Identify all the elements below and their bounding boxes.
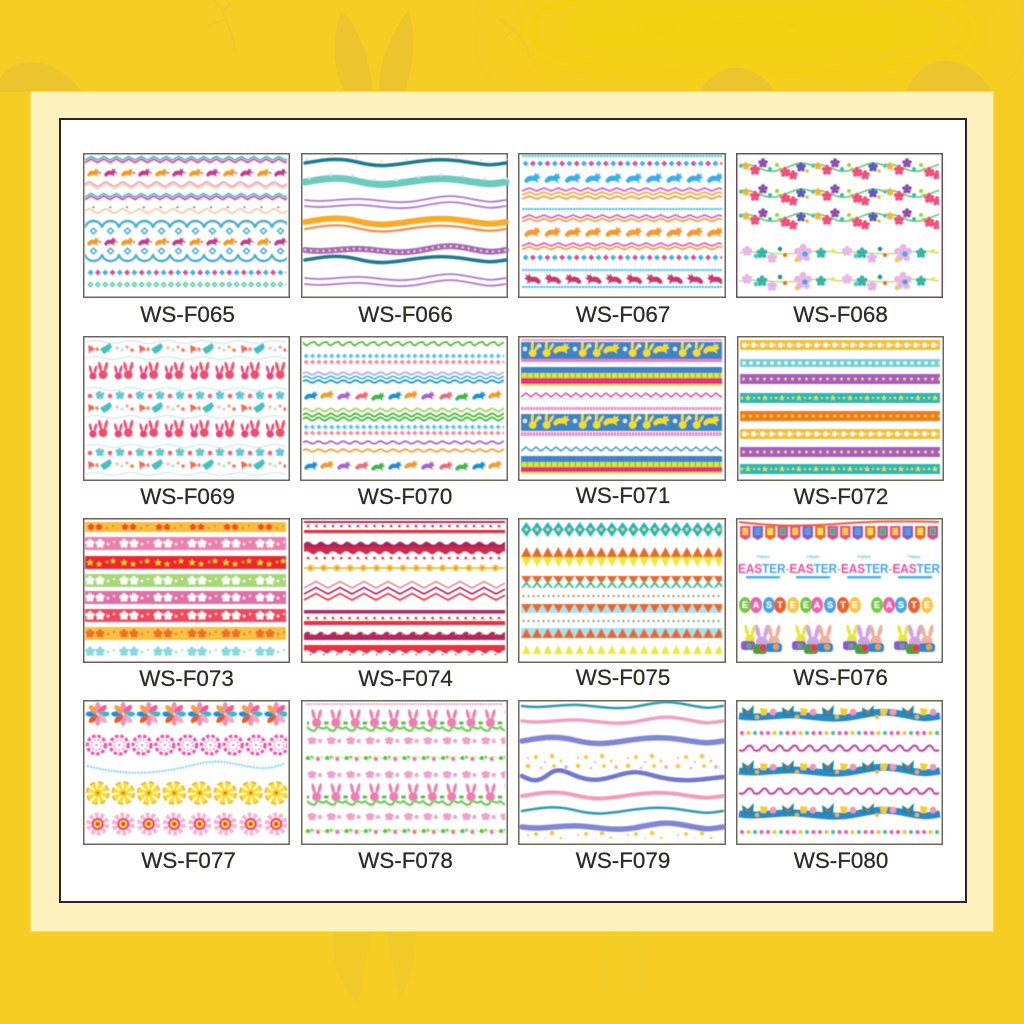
teal diamonds [521, 522, 722, 537]
blue rabbit band [521, 414, 722, 431]
frame [84, 337, 289, 480]
magenta stripe [521, 467, 722, 472]
dots [521, 830, 722, 839]
wave [85, 181, 287, 189]
purple dotted wave [305, 246, 506, 252]
rabbits [85, 168, 287, 178]
artwork [85, 522, 286, 657]
zigzag [85, 155, 287, 164]
pastel floral [739, 270, 939, 292]
pink sunflowers [85, 812, 287, 836]
yellow dots [305, 246, 506, 252]
frame [519, 701, 725, 844]
pink wave [522, 792, 723, 798]
card WS-F066 [302, 154, 510, 327]
blue wave [303, 379, 504, 384]
egg letters: E [742, 600, 748, 610]
pink zigzag [521, 392, 722, 398]
label: WS-F066 [358, 302, 453, 327]
teal line [86, 471, 286, 477]
red strip [85, 556, 286, 569]
happy easter words: EASTER-EASTER-EASTER-EASTER [738, 561, 941, 576]
frame [519, 519, 725, 662]
orange strip [740, 411, 940, 421]
dark teal wave [305, 256, 506, 262]
zigzag [522, 214, 722, 223]
dots [521, 594, 722, 598]
rabbits [303, 460, 504, 471]
bunny ears bottom [333, 931, 416, 1005]
butterflies [86, 459, 286, 471]
yellow triangles [521, 645, 722, 654]
artwork [521, 339, 722, 474]
frame [84, 519, 289, 662]
lavender wave [303, 371, 504, 376]
diamonds [85, 247, 287, 255]
yellow triangles [521, 557, 722, 567]
diamonds [85, 227, 287, 235]
outer cream panel [31, 92, 993, 931]
label: WS-F080 [794, 848, 888, 873]
artwork [85, 155, 287, 288]
dotted line [305, 703, 503, 705]
pink strip [85, 591, 286, 604]
artwork [739, 704, 940, 835]
light teal strip [740, 359, 940, 367]
orange green zigzag [521, 576, 722, 588]
red line [304, 530, 505, 533]
garland [739, 157, 939, 181]
scallop band [304, 540, 505, 556]
card WS-F074 [302, 519, 507, 691]
label: WS-F078 [358, 848, 453, 873]
happy easter words: Happy [907, 554, 921, 559]
orange wave [303, 448, 504, 453]
diamonds [522, 160, 722, 167]
card WS-F072 [738, 337, 943, 509]
blue wavy band [739, 767, 940, 773]
yellow strip [740, 429, 940, 439]
artwork [86, 339, 286, 477]
dots [739, 730, 939, 736]
pale teal band [521, 398, 722, 400]
vines [304, 828, 505, 835]
blue wavy band [739, 712, 940, 718]
egg letters: A [753, 600, 760, 610]
purple wave [305, 280, 506, 286]
purple strip [740, 374, 940, 384]
teal line [86, 355, 286, 361]
yellow line [521, 472, 722, 474]
green scallop [307, 726, 505, 732]
dotted wave [85, 205, 287, 214]
yellow strip [85, 627, 286, 640]
teal strip [740, 393, 940, 403]
blue rabbits [522, 172, 722, 184]
egg shapes top [0, 60, 993, 92]
teal wave [305, 178, 506, 184]
label: WS-F079 [576, 848, 670, 873]
garland [739, 207, 939, 231]
dots [521, 619, 722, 623]
pastel floral [739, 242, 939, 264]
purple wave [305, 202, 506, 208]
label: WS-F077 [141, 848, 236, 873]
artwork [738, 521, 941, 654]
blue line [522, 155, 722, 157]
zigzag [522, 187, 722, 202]
bunting [739, 521, 939, 541]
artwork [740, 340, 940, 474]
yellow dots [304, 564, 505, 572]
artwork [522, 155, 722, 288]
birds [739, 759, 939, 775]
green scallop [303, 340, 504, 347]
yellow strip [85, 522, 286, 532]
butterflies [86, 402, 286, 414]
bubbles [309, 174, 510, 180]
frame [84, 701, 289, 844]
egg letters: T [840, 600, 846, 610]
label: WS-F074 [358, 666, 453, 691]
bunnies [86, 419, 286, 439]
artwork [304, 703, 505, 835]
diamonds [87, 281, 286, 288]
egg bottom [600, 930, 648, 1010]
artwork [303, 340, 504, 471]
egg letters: T [777, 600, 783, 610]
egg letters: E [874, 600, 880, 610]
frame [301, 337, 507, 480]
birds [739, 802, 939, 818]
card WS-F068 [737, 154, 942, 327]
blue diamonds [303, 424, 504, 430]
bubbles [307, 155, 508, 162]
orange wave [305, 218, 506, 224]
green wave [303, 416, 504, 422]
label: WS-F069 [140, 484, 235, 509]
diamonds [87, 269, 286, 276]
flowers [86, 391, 286, 400]
garland [739, 183, 939, 207]
teal wave [522, 807, 723, 814]
butterflies [86, 343, 286, 355]
red dots [304, 615, 505, 621]
zigzag [85, 192, 287, 201]
card WS-F080 [737, 701, 942, 873]
blue diamonds [303, 353, 504, 359]
pink diamonds [303, 430, 504, 436]
green wave [303, 412, 504, 418]
artwork [305, 155, 510, 286]
blue line [522, 269, 722, 271]
frame [519, 154, 725, 297]
label: WS-F076 [793, 665, 888, 690]
yellow line [521, 384, 722, 386]
card WS-F070 [301, 337, 507, 509]
pink dashes [521, 407, 722, 410]
egg letters [739, 597, 933, 613]
red dots [304, 555, 505, 561]
paws [307, 771, 505, 778]
blue line [522, 208, 722, 210]
frame [737, 154, 942, 297]
card WS-F065 [84, 154, 289, 327]
happy easter words [738, 554, 941, 578]
zigzags [304, 580, 505, 604]
bunnies [307, 783, 505, 801]
light green wave [303, 407, 504, 413]
dots [739, 829, 939, 835]
label: WS-F075 [576, 665, 670, 690]
frame [302, 519, 507, 662]
egg letters: E [790, 600, 796, 610]
teal wave [522, 702, 723, 708]
maroon line [304, 610, 505, 614]
egg letters: E [924, 600, 930, 610]
egg letters: A [886, 600, 893, 610]
pink dashes [521, 432, 722, 436]
label: WS-F073 [139, 666, 234, 691]
frame [84, 154, 289, 297]
purple wave [305, 196, 506, 202]
egg letters: A [814, 600, 821, 610]
blue stripe [521, 456, 722, 462]
paws [307, 813, 505, 820]
red line [304, 621, 505, 625]
bunny groups [738, 624, 940, 654]
zigzag [522, 242, 722, 251]
label: WS-F070 [358, 484, 452, 509]
maroon scallop [304, 631, 505, 640]
green strip [85, 574, 286, 587]
teal strip [740, 464, 940, 474]
label: WS-F065 [140, 302, 235, 327]
egg letters: S [827, 600, 833, 610]
scallop bottom [85, 253, 287, 264]
label: WS-F071 [576, 483, 670, 508]
label: WS-F068 [793, 302, 888, 327]
purple wave [305, 274, 506, 280]
frame [302, 701, 507, 844]
card WS-F079 [519, 701, 725, 873]
egg letters: T [911, 600, 917, 610]
happy easter words: Happy [857, 554, 871, 559]
label: WS-F067 [576, 302, 670, 327]
blue rabbit band [521, 342, 722, 359]
frame [738, 337, 943, 480]
teal flowers [85, 646, 286, 657]
vines [304, 755, 505, 762]
egg letters: E [852, 600, 858, 610]
artwork [739, 157, 939, 292]
bunnies [86, 361, 286, 381]
maroon line [304, 521, 505, 523]
red-pink strip [85, 609, 286, 622]
paws [307, 737, 505, 744]
card WS-F075 [519, 519, 725, 690]
inner white panel [60, 119, 966, 902]
magenta wave [739, 744, 939, 753]
blue zigzag [521, 446, 722, 452]
flowers [86, 448, 286, 457]
light patch [520, 0, 980, 68]
frame [519, 337, 725, 480]
teal line [86, 339, 286, 345]
red dots [304, 523, 505, 529]
dark teal wave [305, 159, 506, 166]
happy easter words: Happy [806, 554, 820, 559]
card WS-F069 [84, 337, 289, 509]
pink strip [85, 537, 286, 550]
bunnies [307, 709, 505, 727]
yellow stripe [521, 373, 722, 378]
orange triangles [521, 547, 722, 557]
blue stripe [521, 367, 722, 373]
card WS-F078 [302, 701, 507, 873]
egg letters: S [766, 600, 772, 610]
card WS-F076 [737, 519, 942, 690]
card WS-F067 [519, 154, 725, 327]
teal line [86, 386, 286, 392]
blue wave [522, 737, 723, 744]
frame [737, 519, 942, 662]
blue wavy [522, 770, 723, 780]
teal line [86, 443, 286, 449]
frame [302, 154, 507, 297]
orange rabbits [522, 226, 722, 238]
magenta wave [739, 787, 939, 796]
blue wavy band [739, 810, 940, 816]
dots [521, 753, 722, 771]
pinwheels [85, 702, 287, 726]
artwork [521, 522, 722, 654]
yellow strip [740, 340, 940, 350]
magenta stripe [521, 378, 722, 384]
purple strip [740, 447, 940, 457]
egg letters: S [898, 600, 904, 610]
pink rabbits [522, 273, 722, 285]
bunny ears top [335, 11, 413, 92]
artwork [85, 702, 287, 836]
sprigs top [208, 0, 530, 58]
purple wave [303, 440, 504, 445]
card WS-F071 [519, 337, 725, 508]
beaded wave [87, 762, 285, 773]
blue wave [522, 823, 723, 829]
pink line [521, 339, 722, 341]
birds [739, 704, 939, 720]
diamonds [522, 254, 722, 261]
frame [737, 701, 942, 844]
teal wave [303, 375, 504, 380]
orange triangles on blue [521, 628, 722, 638]
pink diamonds [303, 359, 504, 365]
rabbits [85, 237, 287, 247]
yellow flowers [85, 781, 287, 805]
card WS-F077 [84, 701, 289, 873]
red scallop [304, 645, 505, 656]
green scallop [307, 800, 505, 806]
artwork [304, 521, 505, 656]
orange triangles on blue [521, 604, 722, 613]
coral wave [305, 225, 506, 232]
label: WS-F072 [794, 484, 888, 509]
scallop top [85, 218, 287, 229]
artwork [521, 702, 723, 839]
card WS-F073 [84, 519, 289, 691]
pink band [521, 359, 722, 362]
pink wave [522, 717, 723, 723]
rabbits [303, 390, 504, 401]
teal line [86, 414, 286, 420]
egg letters: E [803, 600, 809, 610]
happy easter words: Happy [756, 554, 770, 559]
blue line [522, 286, 722, 288]
pink flowers [85, 734, 287, 756]
yellow stripe [521, 462, 722, 467]
